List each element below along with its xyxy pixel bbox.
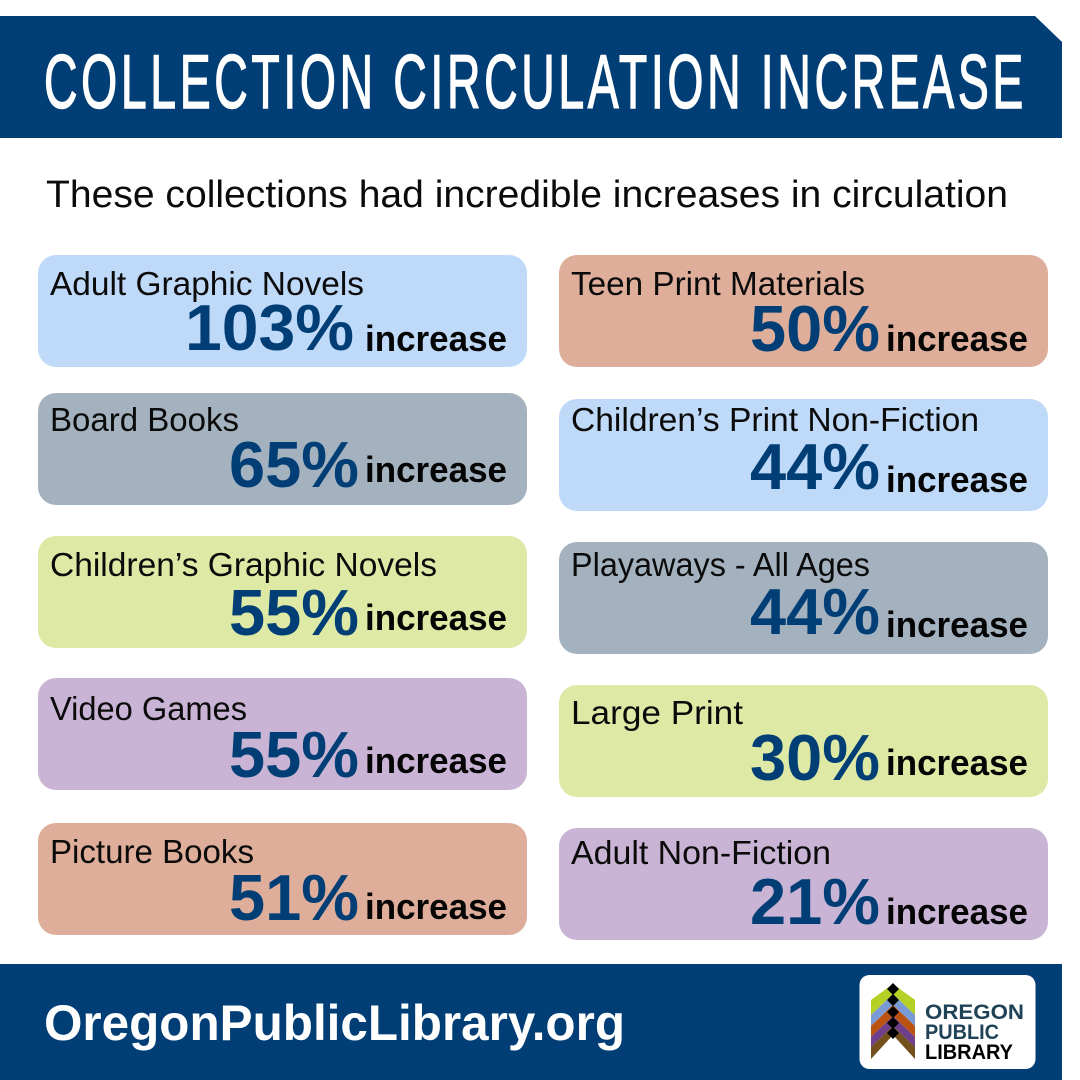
card: Adult Graphic Novels: increase xyxy=(365,318,507,359)
logo wordmark: LIBRARY xyxy=(925,1040,1013,1064)
card: Children's Graphic Novels: 55% xyxy=(229,576,359,649)
card: Board Books xyxy=(38,393,527,505)
card: Children's Print Non-Fiction: 44% xyxy=(750,430,880,503)
card: Teen Print Materials xyxy=(559,255,1048,367)
card: Playaways - All Ages xyxy=(559,542,1048,654)
logo wordmark: PUBLIC xyxy=(925,1020,999,1044)
logo xyxy=(860,975,1036,1069)
card: Adult Non-Fiction: Adult Non-Fiction xyxy=(571,834,831,871)
card: Picture Books: Picture Books xyxy=(50,833,254,870)
card: Adult Graphic Novels: Adult Graphic Novels xyxy=(50,265,364,302)
footer bar xyxy=(0,964,1062,1080)
card: Children's Graphic Novels: increase xyxy=(365,597,507,638)
card: Large Print: increase xyxy=(886,742,1028,783)
card: Playaways - All Ages: 44% xyxy=(750,575,880,648)
card: Board Books: Board Books xyxy=(50,401,239,438)
card: Board Books: 65% xyxy=(229,428,359,501)
card: Adult Non-Fiction: 21% xyxy=(750,865,880,938)
card: Large Print xyxy=(559,685,1048,797)
card: Teen Print Materials: Teen Print Materials xyxy=(571,265,865,302)
card: Teen Print Materials: 50% xyxy=(750,292,880,365)
card: Playaways - All Ages: increase xyxy=(886,604,1028,645)
logo wordmark: OREGON xyxy=(925,1000,1024,1024)
card: Children's Print Non-Fiction: Children’s Print Non-Fiction xyxy=(571,401,979,438)
card: Large Print: Large Print xyxy=(571,694,743,731)
card: Picture Books: increase xyxy=(365,886,507,927)
card: Picture Books: 51% xyxy=(229,861,359,934)
card: Children's Print Non-Fiction: increase xyxy=(886,459,1028,500)
card: Adult Non-Fiction: increase xyxy=(886,891,1028,932)
card: Large Print: 30% xyxy=(750,721,880,794)
card: Children's Print Non-Fiction xyxy=(559,399,1048,511)
card: Adult Graphic Novels xyxy=(38,255,527,367)
card: Children's Graphic Novels xyxy=(38,536,527,649)
card: Teen Print Materials: increase xyxy=(886,318,1028,359)
logo wordmark xyxy=(925,1000,1024,1064)
card: Video Games: Video Games xyxy=(50,690,247,727)
website url: OregonPublicLibrary.org xyxy=(44,995,625,1051)
header banner xyxy=(0,16,1062,138)
card: Playaways - All Ages: Playaways - All Ages xyxy=(571,546,870,583)
card: Video Games xyxy=(38,678,527,791)
card: Adult Non-Fiction xyxy=(559,828,1048,940)
card: Children's Graphic Novels: Children’s Graphic Novels xyxy=(50,546,437,583)
card: Video Games: increase xyxy=(365,740,507,781)
card: Picture Books xyxy=(38,823,527,935)
card: Adult Graphic Novels: 103% xyxy=(185,291,354,364)
card: Video Games: 55% xyxy=(229,718,359,791)
icon: chevron stack xyxy=(871,983,915,1059)
card: Board Books: increase xyxy=(365,449,507,490)
subtitle: These collections had incredible increases in circulation xyxy=(46,174,1008,216)
